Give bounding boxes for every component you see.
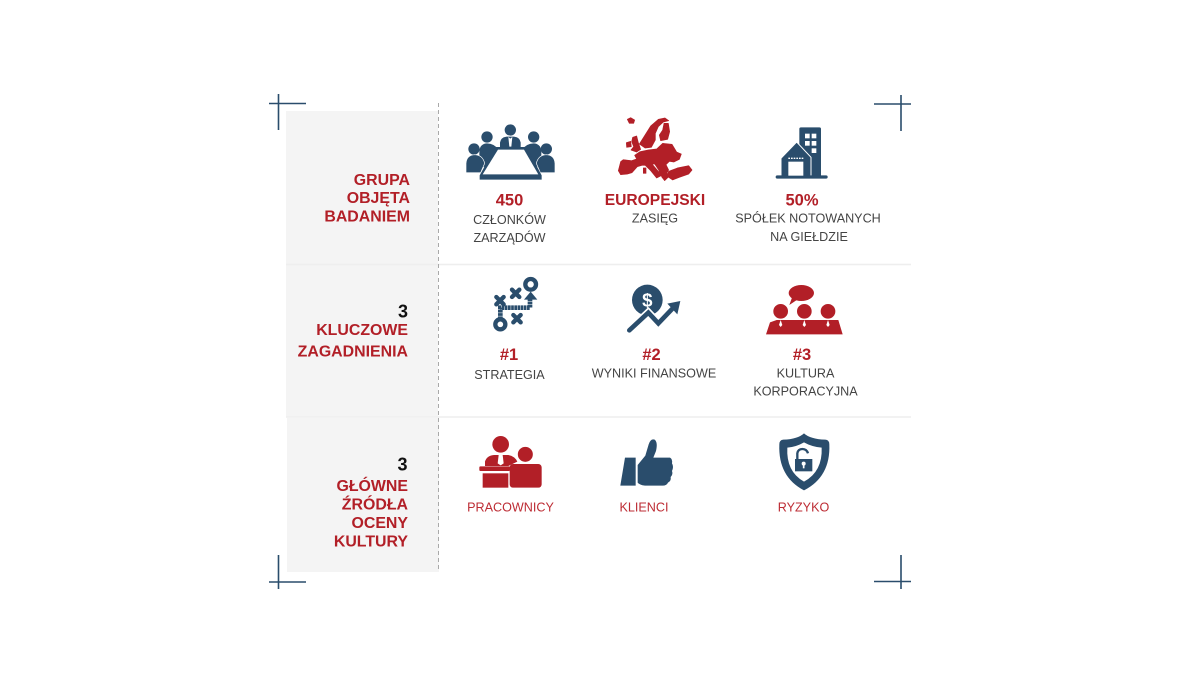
icon: shield with padlock xyxy=(779,433,829,490)
stat: #2 wyniki finansowe xyxy=(592,346,716,380)
stat: 450 członków zarządów xyxy=(473,192,546,245)
crop mark: top left xyxy=(269,94,306,130)
stat: #3 kultura korporacyjna: KORPORACYJNA xyxy=(753,384,858,398)
stat: 450 członków zarządów: ZARZĄDÓW xyxy=(473,230,546,245)
stat: #3 kultura korporacyjna xyxy=(753,346,858,398)
stat: 50% spółek notowanych na giełdzie: 50% xyxy=(785,192,819,210)
stat: 50% spółek notowanych na giełdzie: NA GIEŁDZIE xyxy=(770,230,848,244)
stat: #2 wyniki finansowe: #2 xyxy=(642,346,661,364)
label: pracownicy: PRACOWNICY xyxy=(467,500,554,514)
heading: grupa objęta badaniem: OBJĘTA xyxy=(347,190,411,207)
heading: 3 kluczowe zagadnienia: KLUCZOWE xyxy=(316,322,408,339)
stat: europejski zasięg: ZASIĘG xyxy=(632,212,678,226)
icon: thumbs up xyxy=(620,439,673,486)
heading: 3 kluczowe zagadnienia: 3 xyxy=(398,302,408,322)
icon: strategy play diagram xyxy=(495,279,537,329)
stat: 450 członków zarządów: 450 xyxy=(496,192,523,210)
icon: coin with rising arrow: $ xyxy=(642,289,653,310)
stat: #1 strategia: #1 xyxy=(500,346,518,364)
icon: map of Europe xyxy=(618,118,692,181)
stat: #3 kultura korporacyjna: #3 xyxy=(793,346,811,364)
stat: 50% spółek notowanych na giełdzie: SPÓŁEK NOTOWANYCH xyxy=(735,210,881,226)
panel: row 3 label background xyxy=(287,418,439,572)
heading: 3 główne źródła oceny kultury xyxy=(334,454,409,550)
label: klienci: KLIENCI xyxy=(620,500,668,514)
stat: #2 wyniki finansowe: WYNIKI FINANSOWE xyxy=(592,366,716,380)
heading: 3 główne źródła oceny kultury: ŹRÓDŁA xyxy=(342,494,409,514)
heading: grupa objęta badaniem: GRUPA xyxy=(354,172,411,189)
panel: row 2 label background xyxy=(286,265,438,417)
label: ryzyko: RYZYKO xyxy=(778,500,829,514)
heading: 3 główne źródła oceny kultury: KULTURY xyxy=(334,534,408,550)
heading: 3 kluczowe zagadnienia: ZAGADNIENIA xyxy=(298,344,409,360)
icon: boardroom table xyxy=(466,124,555,180)
stat: 50% spółek notowanych na giełdzie xyxy=(735,192,881,244)
icon: coin with rising arrow xyxy=(629,285,680,330)
heading: grupa objęta badaniem: BADANIEM xyxy=(324,208,410,226)
heading: 3 główne źródła oceny kultury: 3 xyxy=(397,454,408,474)
crop mark: bottom left xyxy=(269,555,306,589)
icon: office building xyxy=(776,127,828,179)
heading: grupa objęta badaniem xyxy=(324,172,411,226)
heading: 3 główne źródła oceny kultury: GŁÓWNE xyxy=(336,476,408,495)
panel: row 1 label background xyxy=(286,111,438,264)
icon: employees xyxy=(479,436,542,488)
stat: 450 członków zarządów: CZŁONKÓW xyxy=(473,212,546,227)
stat: #1 strategia: STRATEGIA xyxy=(474,368,545,382)
stat: #1 strategia xyxy=(474,346,545,382)
crop mark: bottom right xyxy=(874,555,911,589)
stat: europejski zasięg xyxy=(605,192,705,226)
stat: #3 kultura korporacyjna: KULTURA xyxy=(777,366,835,380)
heading: 3 kluczowe zagadnienia xyxy=(298,302,409,360)
icon: team with speech bubble xyxy=(766,285,843,334)
heading: 3 główne źródła oceny kultury: OCENY xyxy=(351,515,408,532)
crop mark: top right xyxy=(874,95,911,131)
stat: europejski zasięg: EUROPEJSKI xyxy=(605,192,705,209)
